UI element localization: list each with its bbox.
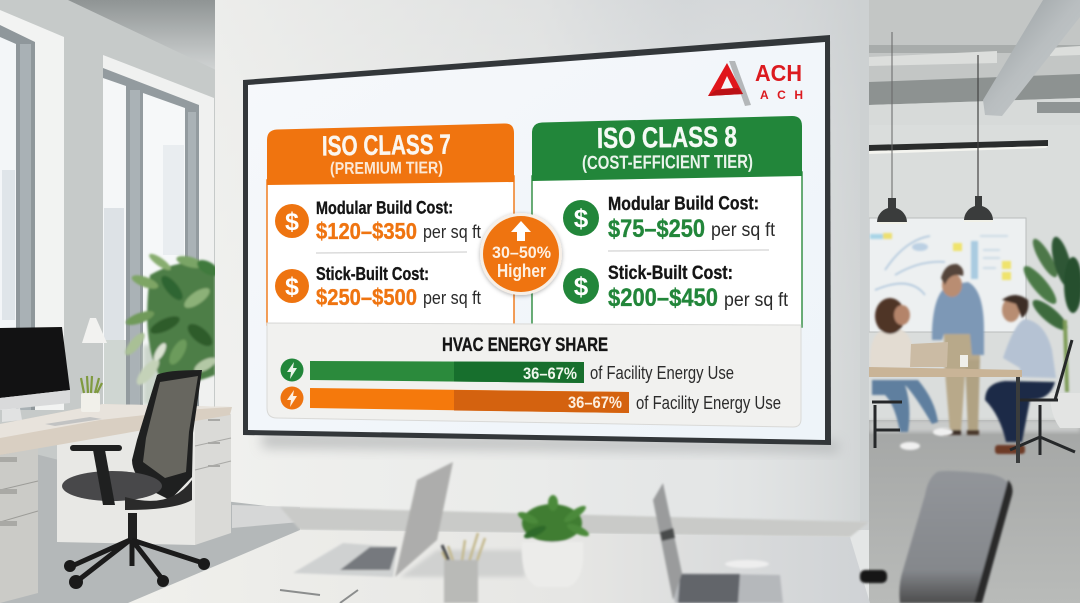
desk shadow [400,550,525,577]
label: facility energy use: of Facility Energy Use [636,393,781,413]
table rear strip [280,507,869,537]
left office zone with windows [0,0,221,530]
mouse [725,560,769,568]
panel: ISO Class 7 [267,123,514,325]
icon: dollar: $ [285,208,299,236]
mug [960,355,968,367]
unit: per sq ft [423,222,481,242]
foreground table with objects [128,462,1012,603]
heading: ISO Class 7: ISO CLASS 7 [322,129,451,161]
subheading: cost-efficient tier: (COST-EFFICIENT TIER) [582,152,753,174]
table top [128,530,870,603]
wall-mounted display [243,35,831,445]
pendant lamps [877,32,993,224]
meeting laptop [910,342,948,367]
laptop right [653,483,783,603]
left pedestal [0,448,38,603]
badge text: 30–50% [492,243,551,262]
bar value: 36–67% [568,393,622,412]
foreground chair [860,471,1012,603]
right window [103,55,214,410]
laptop left [293,462,453,577]
desk plant [81,376,102,412]
person: seated man [985,295,1056,454]
left floor and desk zone [0,318,300,603]
value: modular price: $120–$350 [316,218,417,244]
bar: orange [310,388,629,413]
left window [0,10,64,410]
value: modular price: $75–$250 [608,215,705,243]
panel background [267,323,801,427]
panel: HVAC energy share [267,323,801,427]
unit: per sq ft [724,290,789,311]
under-desk panel [57,420,195,545]
text: stick-built cost: Stick-Built Cost: [316,264,429,284]
keyboard [45,417,102,426]
logo: ACH [708,60,803,106]
linear light [869,140,1048,154]
right office zone [869,0,1080,603]
corner plant [1019,235,1080,392]
logo text: ACH [755,60,802,86]
icon: up arrow [511,221,531,241]
right pedestal [195,414,231,545]
bar: green [310,361,584,383]
panel body [532,172,802,327]
meeting chairs [872,340,1075,455]
wall vent [1037,102,1080,113]
panel header [532,116,802,181]
icon: dollar: $ [574,272,589,302]
panel header [267,123,514,185]
window plant [122,251,221,388]
heading: ISO Class 8: ISO CLASS 8 [597,121,737,155]
display screen [248,42,825,440]
icon: green bolt [280,358,304,382]
icon: dollar [275,269,309,303]
bar value: 36–67% [523,364,577,383]
icon: dollar: $ [285,273,299,301]
heading: HVAC energy share: HVAC ENERGY SHARE [442,335,608,356]
icon: orange bolt [280,386,304,410]
icon: dollar [275,204,309,238]
icon: dollar [563,268,599,304]
panel body [267,176,514,325]
value: stick-built price: $200–$450 [608,284,718,312]
pencil cup [442,533,485,603]
logo mark [708,61,751,106]
whiteboard [869,218,1026,332]
badge: 30-50% higher [480,213,562,295]
icon: dollar: $ [574,204,589,234]
badge text: Higher [497,261,546,281]
text: modular build cost: Modular Build Cost: [608,193,759,215]
wall side lighting [215,0,869,530]
text: modular build cost: Modular Build Cost: [316,197,453,218]
office chair [62,370,210,589]
stationery pens [280,590,358,603]
meeting table [869,367,1022,463]
unit: per sq ft [711,220,776,241]
person: standing man [932,264,984,435]
structural column [860,0,869,522]
monitor [0,327,70,422]
meeting floor [869,420,1080,603]
right duct [983,0,1080,116]
desk lamp [82,318,107,343]
icon: dollar [563,200,599,236]
plant pot [1050,393,1080,428]
wall shadow under display [262,432,838,452]
panel: ISO Class 8 [532,116,802,327]
ceiling duct [68,0,216,70]
subheading: premium tier: (PREMIUM TIER) [330,158,443,178]
logo: ACH: ACH [760,88,803,102]
desktop [0,404,232,455]
display bezel [243,35,831,445]
label: facility energy use: of Facility Energy Use [590,363,734,383]
person: seated woman [870,298,953,450]
text: stick-built cost: Stick-Built Cost: [608,263,733,284]
main wall [215,0,869,530]
unit: per sq ft [423,288,481,308]
potted plant [516,495,591,587]
value: stick-built price: $250–$500 [316,284,417,310]
